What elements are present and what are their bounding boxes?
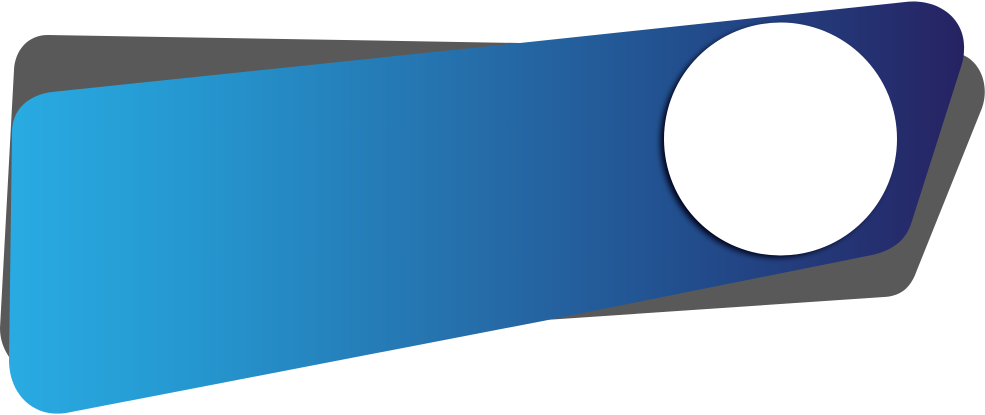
white circle <box>664 22 897 256</box>
circle shadow <box>660 26 892 258</box>
